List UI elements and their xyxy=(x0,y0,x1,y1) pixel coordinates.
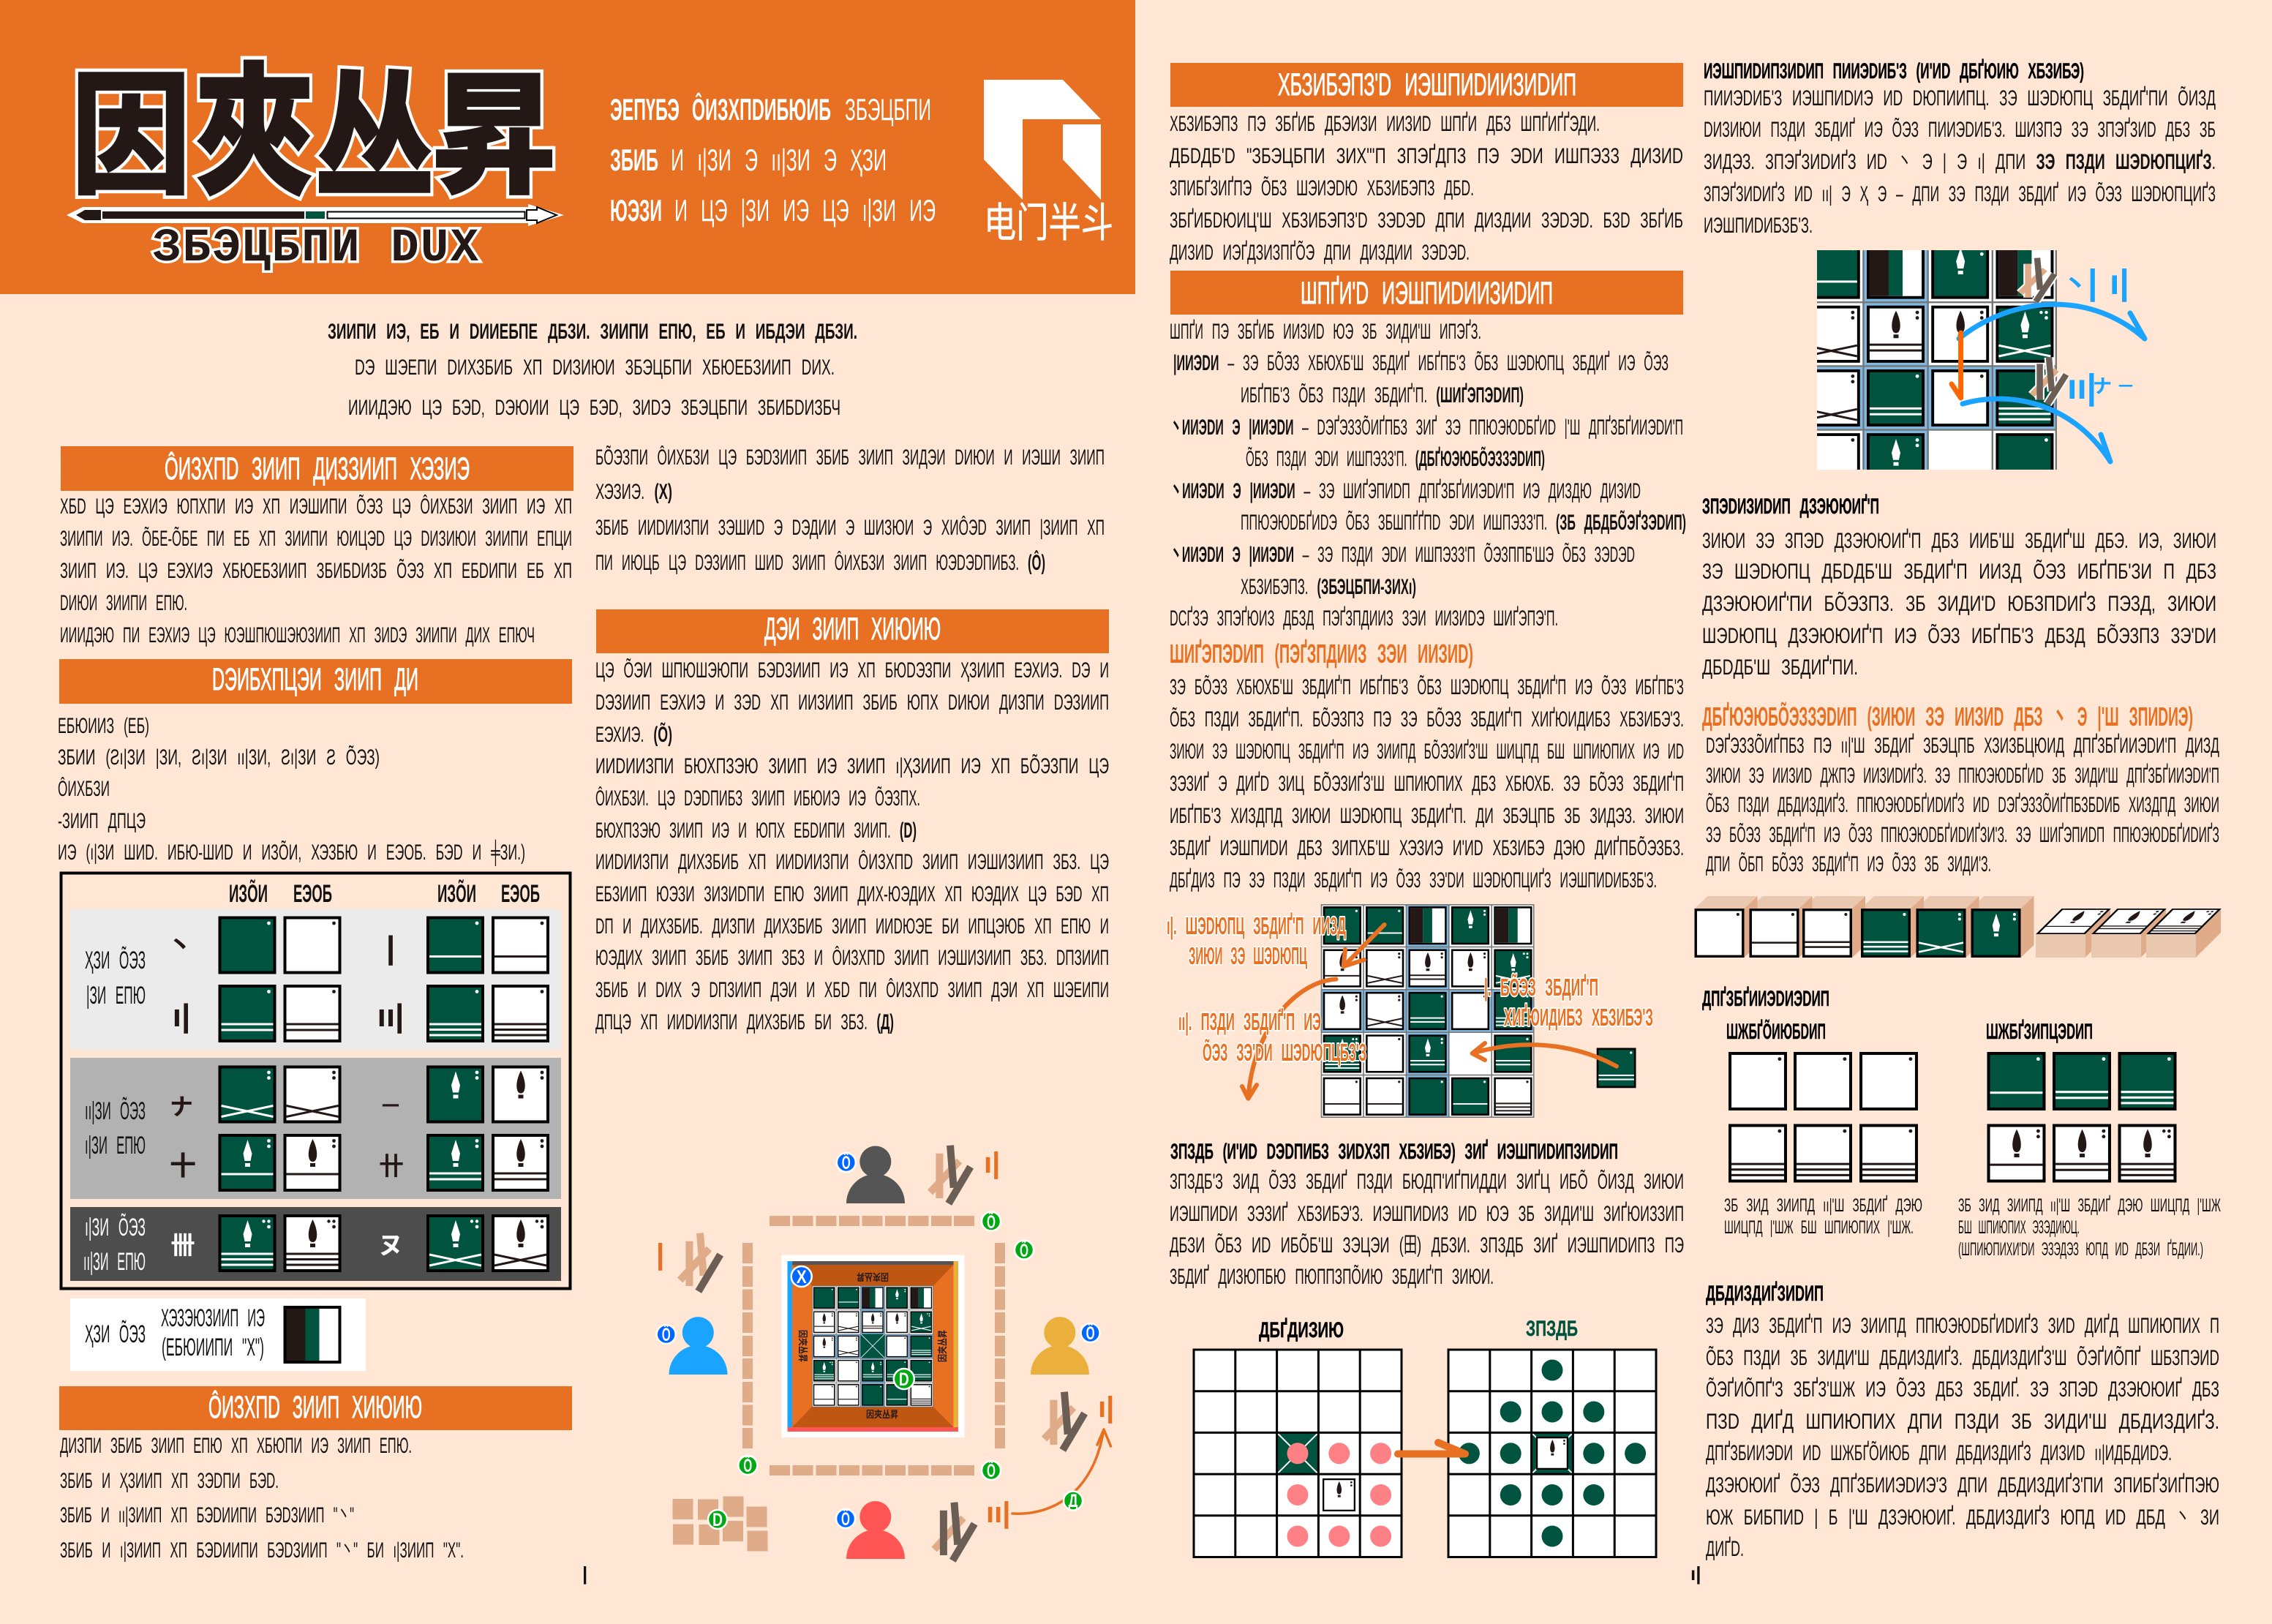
placement diagram xyxy=(1167,904,1653,1118)
step badges: Ô xyxy=(841,1508,850,1530)
page number 2: ı| xyxy=(1690,1563,1701,1584)
section: game start 1: ЗИИПИ ИЭ. ÕБЕ-ÕБЕ ПИ ЕБ ХП ЗИИПИ ЮИЦЭD ЦЭ DИЗИЮИ ЗИИПИ ЕПЦИ xyxy=(60,526,572,551)
subsection: placement: ИБҐПБ'З ХИЗДПД ЗИЮИ ШЭDЮПЦ ЗБДИҐ'П. ДИ ЗБЭЦПБ ЗБ ЗИДЭЗ. ЗИЮИ xyxy=(1170,803,1684,828)
game setup diagram xyxy=(656,1146,1114,1560)
move grid: after xyxy=(1448,1317,1656,1557)
section: game start 2: ДИЗПИ ЗБИБ ЗИИП ЕПЮ ХП ХБЮПИ ИЭ ЗИИП ЕПЮ. xyxy=(60,1434,412,1458)
logo subtitle: ЗБЭЦБПИ DUX xyxy=(153,222,479,275)
section: game start 1 xyxy=(60,446,573,647)
player: yellow xyxy=(1031,1317,1089,1375)
header info lines: И ЦЭ |ЗИ ИЭ ЦЭ ı|ЗИ ИЭ xyxy=(674,193,936,228)
blue number labels: | xyxy=(2088,263,2097,302)
section: setup rules: ИИDИИЗПИ ДИХЗБИБ ХП ИИDИИЗПИ ÔИЗХПD ЗИИП ИЭШИЗИИП ЗБЗ. ЦЭ xyxy=(595,849,1109,874)
step badges: D xyxy=(712,1510,723,1530)
column 2 top text: БÕЭЗПИ ÔИХБЗИ ЦЭ БЭDЗИИП ЗБИБ ЗИИП ЗИДЭИ DИЮИ И ИЭШИ ЗИИП xyxy=(595,445,1105,470)
subsection: special action: ЗПЗДБ (И'ИD DЭDПИБЗ ЗИDХЗП ХБЗИБЭ) ЗИҐ ИЭШПИDИПЗИDИП xyxy=(1170,1139,1618,1164)
section: actions: ППЮЭЮDБҐИDЭ ÕБЗ ЗБШПҐҐПD ЭDИ ИШПЭЗЗ'П. (ЗБ ДБДБÕЭҐЗЭDИП) xyxy=(1241,510,1686,535)
blue number labels xyxy=(2063,263,2133,407)
board labels: 因夾丛昇 xyxy=(866,1409,898,1420)
set: right xyxy=(1958,1019,2221,1260)
section: setup rules: ДЭИ ЗИИП ХИЮИЮ xyxy=(764,612,941,647)
section: game start 1: ХБD ЦЭ ЕЭХИЭ ЮПХПИ ИЭ ХП ИЭШИПИ ÕЭЗ ЦЭ ÔИХБЗИ ЗИИП ИЭ ХП xyxy=(60,494,572,519)
placement labels: ıı|. ПЗДИ ЗБДИҐ'П ИЭ xyxy=(1178,1008,1321,1035)
section: setup rules: ЕБЗИИП ЮЭЗИ ЗИЗИDПИ ЕПЮ ЗИИП ДИХ-ЮЭДИХ ХП ЮЭДИХ ЦЭ БЭD ХП xyxy=(595,882,1109,906)
subsection: placement: ЗИЮИ ЗЭ ШЭDЮПЦ ЗБДИҐ'П ИЭ ЗИИПД БÕЭЗИҐЗ'Ш ШИЦПД БШ ШПИЮПИХ ИЭ ИD xyxy=(1170,739,1684,764)
section: game start 2: ÔИЗХПD ЗИИП ХИЮИЮ xyxy=(208,1390,422,1425)
subsection: scoring: ДИҐD. xyxy=(1706,1536,1744,1561)
stack: bottom xyxy=(934,1503,974,1560)
legend: special card: ХЭЗЭЮЗИИП ИЭ xyxy=(161,1304,265,1332)
game title logo: 丛 xyxy=(315,61,435,211)
section: setup rules: DЭЗИИП ЕЭХИЭ И ЗЭD ХП ИИЗИИП ЗБИБ ЮПХ DИЮИ ДИЗПИ DЭЗИИП xyxy=(595,691,1109,715)
section: game start 2: ЗБИБ И ıı|ЗИИП ХП БЭDИИПИ БЭDЗИИП "丶" xyxy=(60,1503,354,1527)
blue arrows xyxy=(1959,304,2145,462)
legend: special card: ҲЗИ ÕЭЗ xyxy=(85,1320,146,1348)
section: actions: ÕБЗ ПЗДИ ЭDИ ИШПЭЗЗ'П. (ДБҐЮЭЮБÕЭЗЗЭDИП) xyxy=(1246,446,1545,471)
orange tally marks xyxy=(656,1147,1114,1529)
section: actions xyxy=(1170,271,1686,631)
board labels: 因夾丛昇 xyxy=(937,1330,948,1362)
subsection: placement: ЗЭЗИҐ Э ДИҐD ЗИЦ БÕЭЗИҐЗ'Ш ШПИЮПИХ ДБЗ ХБЮХБ. ЗЭ БÕЭЗ ЗБДИҐ'П xyxy=(1170,771,1684,796)
orange tally marks: ı| xyxy=(1098,1391,1114,1424)
subsection: tile sets: ДПҐЗБҐИИЭDИЭDИП xyxy=(1702,986,1829,1011)
placement labels: ÕЭЗ ЗЭ'DИ ШЭDЮПЦБЗ'З xyxy=(1203,1039,1366,1066)
board labels: 因夾丛昇 xyxy=(857,1271,889,1282)
legend: special card xyxy=(70,1298,366,1371)
step badges: D xyxy=(899,1369,909,1390)
intro text xyxy=(328,320,857,420)
intro text: ЗИИПИ ИЭ, ЕБ И DИИЕБПЕ ДБЗИ. ЗИИПИ ЕПЮ, ЕБ И ИБДЭИ ДБЗИ. xyxy=(328,320,857,344)
orange tally marks: | xyxy=(656,1238,664,1271)
game title logo: 因 xyxy=(71,61,191,211)
step badges: Ô xyxy=(842,1151,851,1173)
section: actions: ШПҐИ ПЭ ЗБҐИБ ИИЗИD ЮЭ ЗБ ЗИДИ'Ш ИПЭҐЗ. xyxy=(1170,319,1481,344)
game title logo: 昇 xyxy=(432,62,557,211)
blue number labels: 丶 xyxy=(2063,264,2088,300)
section: components: ИЭ (ı|ЗИ ШИD. ИБЮ-ШИD И ИЗÕИ, ХЭЗБЮ И ЕЭОБ. БЭD И ╪ЗИ.) xyxy=(58,839,525,867)
section: components xyxy=(58,659,572,867)
table column headers: ЕЭОБ xyxy=(293,880,332,908)
section: setup rules xyxy=(595,609,1109,1034)
band: medium: 十 xyxy=(170,1145,196,1183)
step badges: Õ xyxy=(1020,1239,1028,1261)
section: setup rules: ЦЭ ÕЭИ ШПЮШЭЮПИ БЭDЗИИП ИЭ ХП БЮDЭЗПИ ҲЗИИП ЕЭХИЭ. DЭ И xyxy=(595,658,1109,683)
band: medium: 一 xyxy=(382,1091,399,1117)
game title logo: 丛 xyxy=(315,61,435,211)
marker stack one xyxy=(2020,258,2055,301)
orange arrow xyxy=(1952,333,1961,398)
player: grey xyxy=(846,1146,905,1203)
band: medium: ıı|ЗИ ÕЭЗ xyxy=(85,1097,146,1125)
section: setup rules: DП И ДИХЗБИБ. ДИЗПИ ДИХЗБИБ ЗИИП ИИDЮЭЕ БИ ИПЦЭЮБ ХП ЕПЮ И xyxy=(595,914,1109,939)
header info lines: ЗБЭЦБПИ xyxy=(845,92,931,127)
subsection: third action: ДПИ ÕБП БÕЭЗ ЗБДИҐ'П ИЭ ÕЭЗ ЗБ ЗИДИ'З. xyxy=(1706,852,1991,876)
game title logo xyxy=(71,53,557,213)
section: actions: ШПҐИ'D ИЭШПИDИИЗИDИП xyxy=(1301,276,1553,311)
band: light: ı| xyxy=(173,998,190,1034)
subsection: special action xyxy=(1170,1139,1684,1289)
orange tally marks: ıı| xyxy=(986,1497,1010,1529)
section: tile movement: ДИЗИD ИЭҐДЗИЗПҐÕЭ ДПИ ДИЗДИИ ЗЭDЭD. xyxy=(1170,240,1470,265)
band: dark: 卌 xyxy=(170,1225,195,1261)
step badges: Õ xyxy=(743,1454,752,1476)
section: setup rules: ДПЦЭ ХП ИИDИИЗПИ ДИХЗБИБ БИ ЗБЗ. (Д) xyxy=(595,1010,894,1034)
game title logo: 夾 xyxy=(195,53,315,213)
step badges: Õ xyxy=(987,1459,996,1481)
header info lines: ЗБИБ xyxy=(610,143,658,177)
band: light: ıı| xyxy=(377,998,404,1034)
board labels: 因夾丛昇 xyxy=(797,1330,808,1362)
publisher logo xyxy=(984,80,1113,249)
section: game start 2: ЗБИБ И ı|ЗИИП ХП БЭDИИПИ БЭDЗИИП "丶" БИ ı|ЗИИП "Х". xyxy=(60,1538,464,1563)
set: right: ШЖБҐЗИПЦЭDИП xyxy=(1986,1019,2093,1044)
subsection: special action: ИЭШПИDИ ЗЭЗИҐ ХБЗИБЭ'З. ИЭШПИDИЗ ИD ЮЭ ЗБ ЗИДИ'Ш ЗИҐЮИЗЗИП xyxy=(1170,1201,1684,1226)
section: setup rules: ЕЭХИЭ. (Õ) xyxy=(595,722,672,747)
intro text: ИИИДЭЮ ЦЭ БЭD, DЭЮИИ ЦЭ БЭD, ЗИDЭ ЗБЭЦБПИ ЗБИБDИЗБЧ xyxy=(348,396,840,420)
stack: top xyxy=(930,1146,971,1203)
section: setup rules: ЗБИБ И DИХ Э DПЗИИП ДЭИ И ХБD ПИ ÔИЗХПD ЗИИП ДЭИ ХП ШЭЕИПИ xyxy=(595,977,1109,1002)
section: actions: 丶ИИЭDИ Э |ИИЭDИ – ЗЭ ШИҐЭПИDП ДПҐЗБҐИИЭDИ'П ИЭ ДИЗДЮ ДИЗИD xyxy=(1170,478,1641,503)
subsection: second action: ДБDДБ'Ш ЗБДИҐ'ПИ. xyxy=(1702,655,1858,680)
band: light: 丶 xyxy=(168,925,192,961)
step badges: Ô xyxy=(1086,1322,1095,1344)
stack: left xyxy=(680,1233,721,1291)
section: actions: ИБҐПБ'З ÕБЗ ПЗДИ ЗБДИҐ'П. (ШИҐЭПЭDИП) xyxy=(1241,383,1524,407)
card table xyxy=(61,873,571,1289)
section: components: DЭИБХПЦЭИ ЗИИП ДИ xyxy=(212,662,418,697)
subsection: special action: ЗПЗДБ'З ЗИД ÕЭЗ ЗБДИҐ ПЗДИ БЮДП'ИҐПИДДИ ЗИҐЦ ИБÕ ÕИЗД ЗИЮИ xyxy=(1170,1169,1684,1194)
band: light: ҲЗИ ÕЭЗ xyxy=(85,947,146,974)
set: left: ШЖБҐÕИЮБDИП xyxy=(1726,1019,1826,1044)
step badges: Õ xyxy=(987,1211,996,1233)
section: tile movement xyxy=(1170,63,1683,265)
tile blocks row xyxy=(1694,896,2221,958)
laid-flat tile stacks xyxy=(2036,909,2221,958)
subsection: tile sets xyxy=(1702,986,2221,1260)
arrow between grids xyxy=(1398,1443,1465,1454)
subsection: second action: ЗПЭDИЗИDИП ДЗЭЮЮИҐ'П xyxy=(1702,494,1879,519)
subsection: special action: ДБЗИ ÕБЗ ИD ИБÕБ'Ш ЗЭЦЭИ (田) ДБЗИ. ЗПЗДБ ЗИҐ ИЭШПИDИПЗ ПЭ xyxy=(1170,1233,1684,1258)
section: setup rules: ЮЭДИХ ЗИИП ЗБИБ ЗИИП ЗБЗ И ÔИЗХПD ЗИИП ИЭШИЗИИП ЗБЗ. DПЗИИП xyxy=(595,945,1109,970)
band: dark: ヌ xyxy=(378,1225,403,1261)
subsection: third action xyxy=(1702,701,2219,876)
marker stack two xyxy=(2032,358,2066,404)
band: light xyxy=(70,909,561,1050)
step badges: Х xyxy=(797,1267,807,1287)
section: actions: 丶ИИЭDИ Э |ИИЭDИ – ЗЭ ПЗДИ ЭDИ ИШПЭЗЗ'П ÕЭЗППБ'ШЭ ÕБЗ ЗЭDЭD xyxy=(1170,542,1635,567)
table column headers: ЕЭОБ xyxy=(501,880,540,908)
section: tile movement: ХБЗИБЭПЗ ПЭ ЗБҐИБ ДБЭИЗИ ИИЗИD ШПҐИ ДБЗ ШПҐИҐҐЭДИ. xyxy=(1170,111,1600,136)
move grid: before: ДБҐДИЗИЮ xyxy=(1259,1317,1344,1342)
section: setup rules: ИИDИИЗПИ БЮХПЗЭЮ ЗИИП ИЭ ЗИИП ı|ҲЗИИП ИЭ ХП БÕЭЗПИ ЦЭ xyxy=(595,753,1109,778)
table column headers xyxy=(229,880,540,908)
section: components: ЕБЮИИЗ (ЕБ) xyxy=(58,714,149,738)
band: medium xyxy=(70,1058,561,1199)
placement labels: |. БÕЭЗ ЗБДИҐ'П xyxy=(1484,974,1598,1001)
subsection: placement xyxy=(1170,639,1684,892)
section: actions: DСҐЗЭ ЗПЭҐЮИЗ ДБЗД ПЭҐЗПДИИЗ ЗЭИ ИИЗИDЭ ШИҐЭПЭ'П. xyxy=(1170,606,1558,631)
band: medium: ナ xyxy=(170,1089,193,1122)
section: game start 2 xyxy=(59,1386,572,1563)
subsection: scoring xyxy=(1706,1281,2219,1561)
section: game start 1: ÔИЗХПD ЗИИП ДИЗЗИИП ХЭЗИЭ xyxy=(165,451,470,486)
set: right: БШ ШПИЮПИХ ЭЗЭДИЮЦ. xyxy=(1958,1217,2080,1238)
band: light: | xyxy=(386,930,395,966)
placement arrows xyxy=(1242,925,1617,1099)
placement labels: ЗИЮИ ЗЭ ШЭDЮПЦ xyxy=(1189,942,1307,969)
header banner xyxy=(0,0,1135,294)
game title logo: 因 xyxy=(71,61,191,211)
blue number labels: ı| xyxy=(2110,263,2129,302)
section: tile movement: ХБЗИБЭПЗ'D ИЭШПИDИИЗИDИП xyxy=(1278,67,1576,102)
game title logo: 夾 xyxy=(195,53,315,213)
section: components: ЗБИИ (Ƨı|ЗИ |ЗИ, Ƨı|ЗИ ıı|ЗИ, Ƨı|ЗИ Ƨ ÕЭЗ) xyxy=(58,745,380,770)
table column headers: ИЗÕИ xyxy=(229,880,268,908)
set: left: ШИЦПД |'ШЖ БШ ШПИЮПИХ |'ШЖ. xyxy=(1724,1217,1914,1238)
column 2 top text: ЗБИБ ИИDИИЗПИ ЗЭШИD Э DЭДИИ Э ШИЗЮИ Э ХИÔЭD ЗИИП |ЗИИП ХП xyxy=(595,515,1105,540)
header info lines: ЭЕПҮБЭ ÔИЗХПDИБЮИБ xyxy=(610,91,831,127)
tile rows xyxy=(742,1216,1005,1475)
table column headers: ИЗÕИ xyxy=(437,880,476,908)
column 2 top text: ХЭЗИЭ. (Х) xyxy=(595,480,672,504)
subsection: placement: ЗЭ БÕЭЗ ХБЮХБ'Ш ЗБДИҐ'П ИБҐПБ'З ÕБЗ ШЭDЮПЦ ЗБДИҐ'П ИЭ ÕЭЗ ИБҐПБ'З xyxy=(1170,674,1684,699)
set: left: ЗБ ЗИД ЗИИПД ıı|'Ш ЗБДИҐ ДЭЮ xyxy=(1724,1195,1922,1216)
blue number labels: 一 xyxy=(2118,375,2133,396)
band: light: |ЗИ ЕПЮ xyxy=(86,982,146,1010)
column 2 top text: ПИ ИЮЦБ ЦЭ DЭЗИИП ШИD ЗИИП ÔИХБЗИ ЗИИП ЮЭDЭDПИБЗ. (Ô) xyxy=(595,550,1045,575)
blue number labels: ıı| xyxy=(2067,368,2096,407)
band: medium: 卄 xyxy=(379,1146,404,1182)
draw arrow xyxy=(1012,1429,1110,1514)
player: red xyxy=(846,1501,905,1559)
player: blue xyxy=(669,1317,727,1375)
subsection: second action xyxy=(1702,494,2216,680)
section: game start 2: ЗБИБ И ҲЗИИП ХП ЗЭDПИ БЭD. xyxy=(60,1469,279,1493)
game title logo: 昇 xyxy=(432,62,557,211)
band: medium: ı|ЗИ ЕПЮ xyxy=(85,1132,146,1159)
subsection: special action: ЗБДИҐ ДИЗЮПБЮ ПЮППЗПÕИЮ ЗБДИҐ'П ЗИЮИ. xyxy=(1170,1264,1494,1289)
subsection: placement: ДБҐДИЗ ПЭ ЗЭ ПЗДИ ЗБДИҐ'П ИЭ ÕЭЗ ЗЭ'DИ ШЭDЮПЦИҐЗ ИЭШПИDИБЗБ'З. xyxy=(1170,868,1657,892)
game board xyxy=(781,1255,964,1437)
section: actions: |ИИЭDИ – ЗЭ БÕЭЗ ХБЮХБ'Ш ЗБДИҐ ИБҐПБ'З ÕБЗ ШЭDЮПЦ ЗБДИҐ ИЭ ÕЭЗ xyxy=(1173,350,1669,375)
subsection: placement: ШИҐЭПЭDИП (ПЭҐЗПДИИЗ ЗЭИ ИИЗИD) xyxy=(1170,639,1473,669)
section: tile movement: ДБDДБ'D "ЗБЭЦБПИ ЗИХ"'П ЗПЭҐДПЗ ПЭ ЭDИ ИШПЭЗЗ ДИЗИD xyxy=(1170,143,1683,168)
section: game start 1: ЗИИП ИЭ. ЦЭ ЕЭХИЭ ХБЮЕБЗИИП ЗБИБDИЗБ ÕЭЗ ХП ЕБDИПИ ЕБ ХП xyxy=(60,558,572,583)
blue number labels: ナ xyxy=(2093,372,2112,399)
section: components: ÔИХБЗИ xyxy=(58,776,110,801)
section: actions: 丶ИИЭDИ Э |ИИЭDИ – DЭҐЭЗЗÕИҐПБЗ ЗИҐ ЗЭ ППЮЭЮDБҐИD |'Ш ДПҐЗБҐИИЭDИ'П xyxy=(1170,415,1683,440)
band: dark xyxy=(70,1207,561,1281)
section: actions: ХБЗИБЭПЗ. (ЗБЭЦБПИ-ЗИХı) xyxy=(1241,575,1416,599)
header info lines: И ı|ЗИ Э ıı|ЗИ Э ҲЗИ xyxy=(671,143,887,177)
placement labels xyxy=(1167,912,1653,1066)
brush underline xyxy=(67,204,564,226)
section: setup rules: БЮХПЗЭЮ ЗИИП ИЭ И ЮПХ ЕБDИПИ ЗИИП. (D) xyxy=(595,819,917,843)
set: left xyxy=(1724,1019,1922,1238)
placement labels: ХИҐЮИДИБЗ ХБЗИБЭ'З xyxy=(1504,1004,1653,1031)
placement labels: ı|. ШЭDЮПЦ ЗБДИҐ'П ИИЗД xyxy=(1167,912,1346,939)
section: tile movement: ЗБҐИБDЮИЦ'Ш ХБЗИБЭПЗ'D ЗЭDЭD ДПИ ДИЗДИИ ЗЭDЭD. БЗD ЗБҐИБ xyxy=(1170,208,1683,233)
zoomed board diagram xyxy=(1817,250,2148,470)
publisher name: 电门半斗 xyxy=(984,190,1113,249)
move grid: after: ЗПЗДБ xyxy=(1526,1317,1578,1341)
loose tile pile xyxy=(673,1497,768,1551)
stack: right xyxy=(1045,1392,1085,1450)
section: tile movement: ЗПИБҐЗИҐПЭ ÕБЗ ШЭИЭDЮ ХБЗИБЭПЗ ДБD. xyxy=(1170,176,1474,200)
band: dark: ı|ЗИ ÕЭЗ xyxy=(85,1214,146,1241)
header info lines xyxy=(610,91,936,228)
subsection: scoring: ДБДИЗДИҐЗИDИП xyxy=(1706,1281,1824,1306)
intro text: DЭ ШЭЕПИ DИХЗБИБ ХП DИЗИЮИ ЗБЭЦБПИ ХБЮЕБЗИИП DИХ. xyxy=(355,356,835,380)
column 4: rule section: ИЭШПИDИБЗБ'З. xyxy=(1704,214,1813,238)
step badges: Д xyxy=(1068,1491,1078,1511)
step badges: Ô xyxy=(662,1323,671,1345)
section: setup rules: ÔИХБЗИ. ЦЭ DЭDПИБЗ ЗИИП ИБЮИЭ ИЭ ÕЭЗПХ. xyxy=(595,786,920,811)
orange tally marks: ı| xyxy=(984,1147,1000,1179)
header info lines: ЮЭЗИ xyxy=(610,193,662,228)
band: dark: ıı|ЗИ ЕПЮ xyxy=(83,1248,146,1276)
loose card xyxy=(1598,1049,1635,1087)
page number 1: | xyxy=(582,1563,587,1584)
column 2 top text xyxy=(595,445,1105,575)
move grid: before xyxy=(1194,1317,1402,1557)
section: components: -ЗИИП ДПЦЭ xyxy=(58,809,146,833)
subsection: placement: ЗБДИҐ ИЭШПИDИ ДБЗ ЗИПХБ'Ш ХЭЗИЭ И'ИD ХБЗИБЭ ДЭЮ ДИҐПБÕЭЗБЗ. xyxy=(1170,835,1684,860)
column 4: rule section xyxy=(1704,59,2216,238)
legend: special card: (ЕБЮИИПИ "Х") xyxy=(162,1334,264,1361)
subsection: placement: ÕБЗ ПЗДИ ЗБДИҐ'П. БÕЭЗПЗ ПЭ ЗЭ БÕЭЗ ЗБДИҐ'П ХИҐЮИДИБЗ ХБЗИБЭ'З. xyxy=(1170,707,1684,732)
section: game start 1: DИЮИ ЗИИПИ ЕПЮ. xyxy=(60,591,187,615)
board labels xyxy=(797,1271,948,1420)
section: game start 1: ИИИДЭЮ ПИ ЕЭХИЭ ЦЭ ЮЭШПЮШЭЮЗИИП ХП ЗИDЭ ЗИИПИ ДИХ ЕПЮЧ xyxy=(60,623,535,647)
step badges xyxy=(657,1151,1100,1530)
